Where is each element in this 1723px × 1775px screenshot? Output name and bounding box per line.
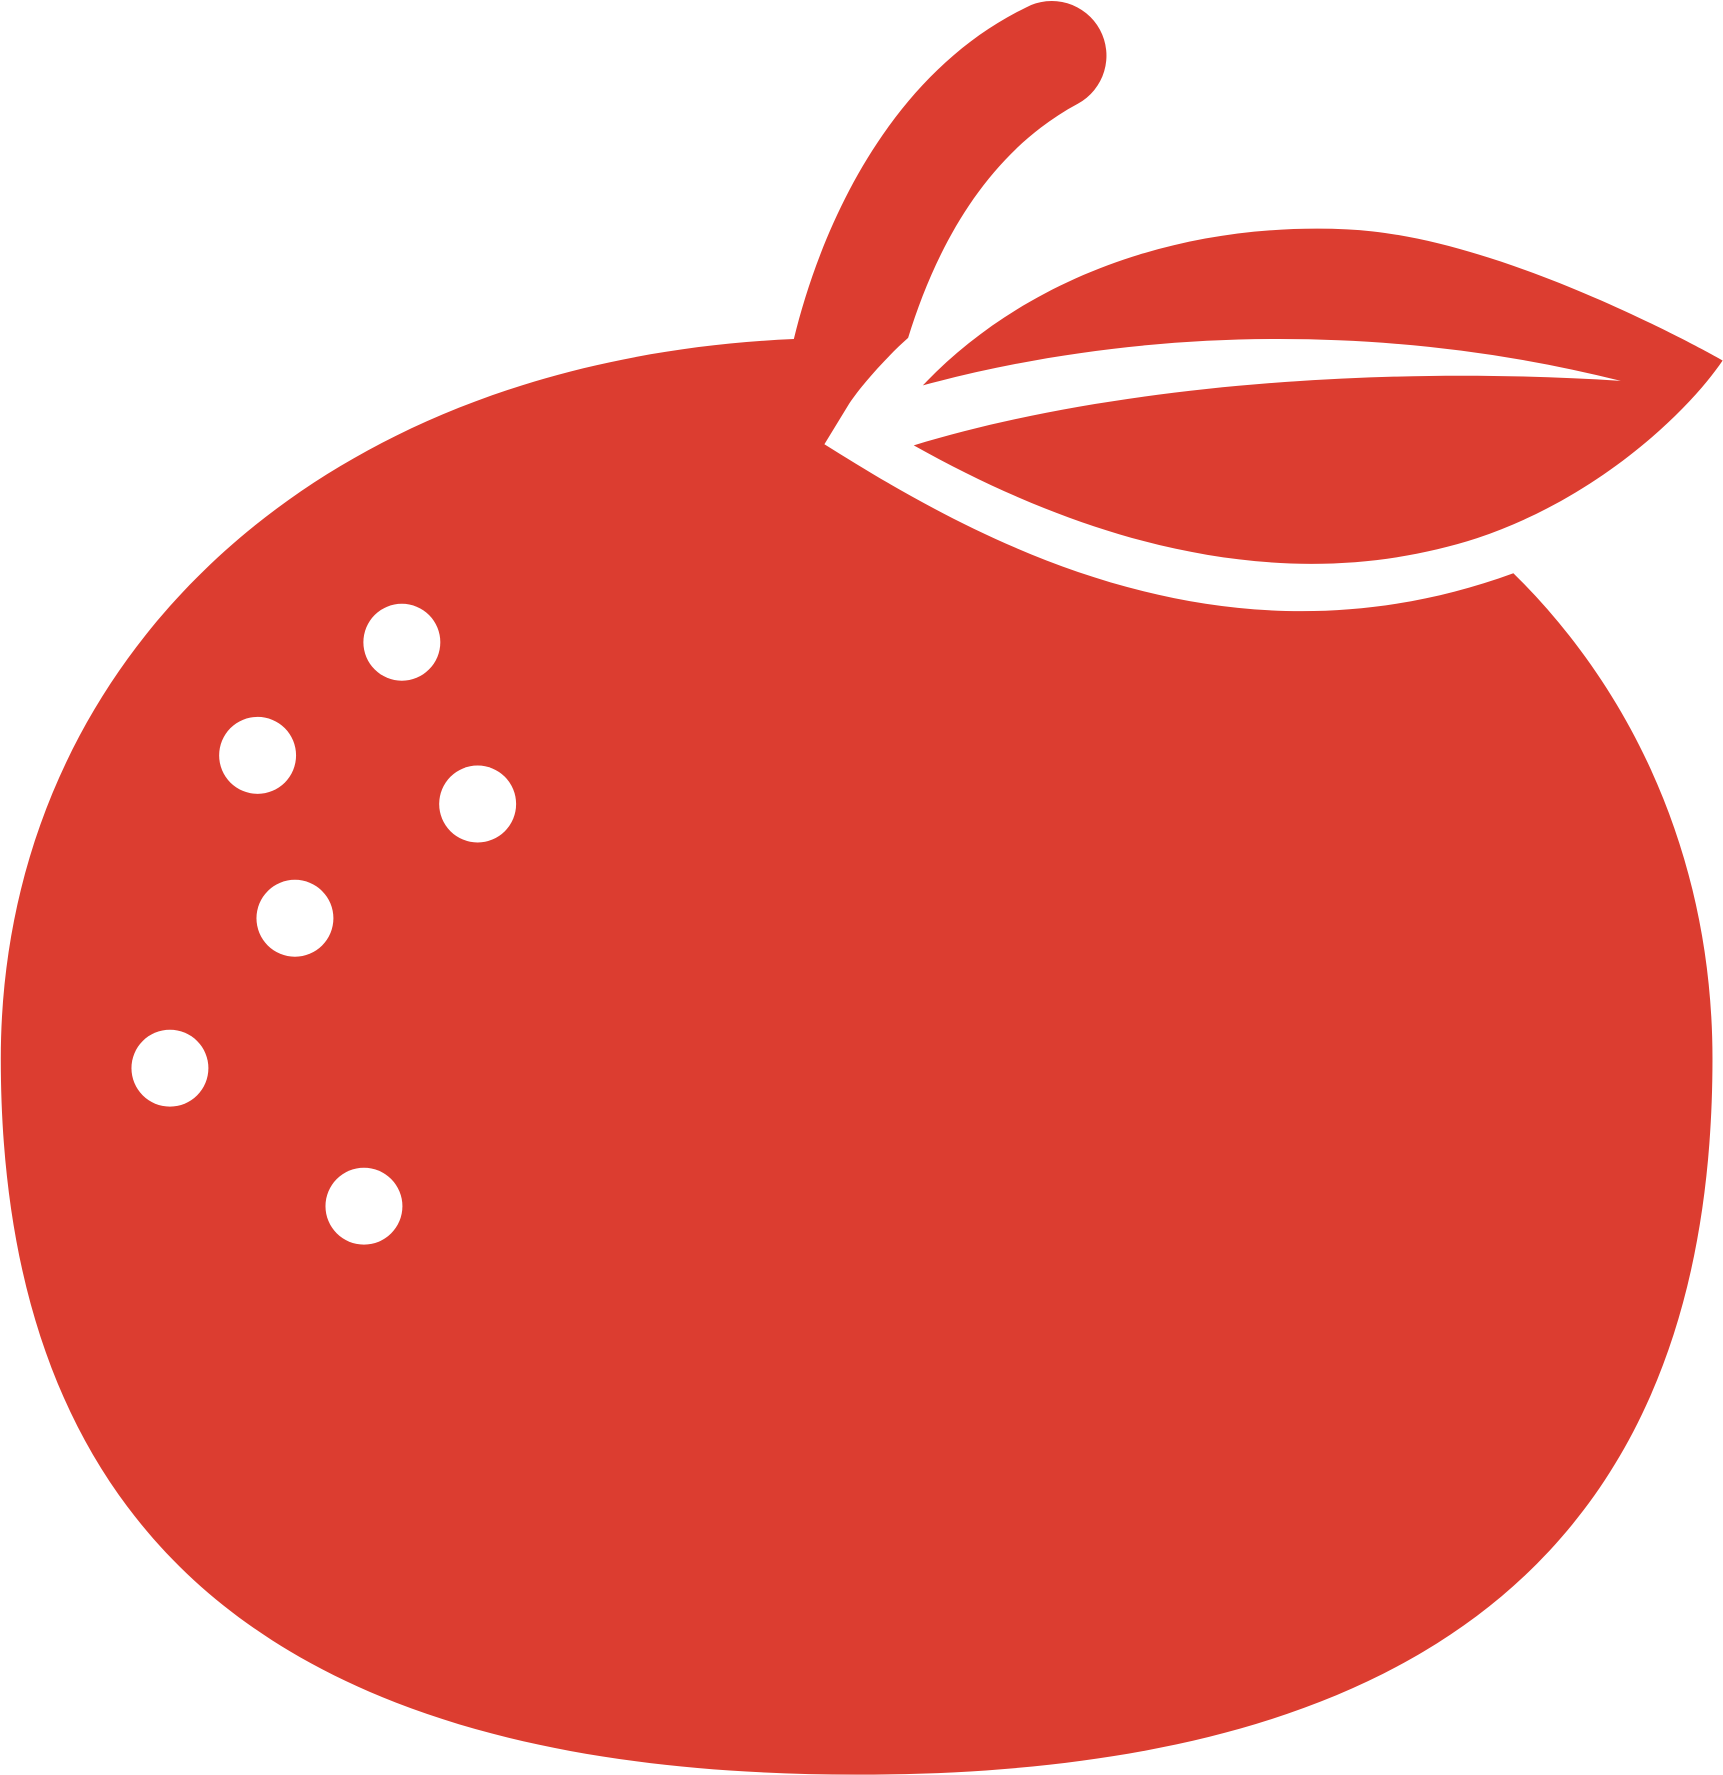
leaf with central slit <box>914 229 1723 564</box>
fruit skin dots <box>131 604 516 1245</box>
